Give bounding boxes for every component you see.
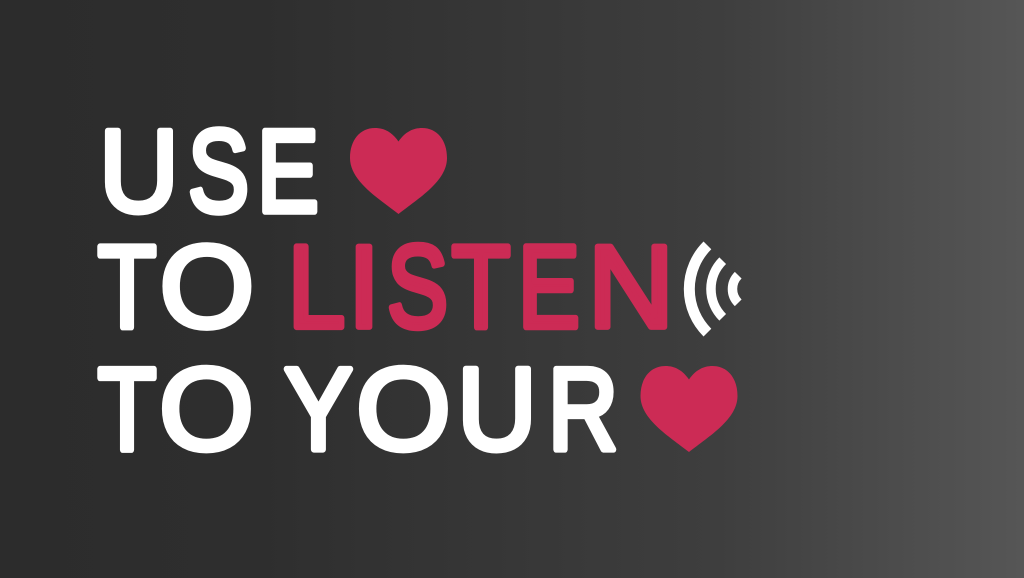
- heading line 2: LISTEN: S: [387, 222, 448, 353]
- heading line 1: USE: U: [99, 106, 179, 237]
- heading line 2: LISTEN: [288, 221, 674, 353]
- heading line 1: USE: S: [188, 106, 249, 237]
- heading line 3: TO YOUR: U: [457, 344, 537, 475]
- heading line 1: USE: E: [257, 107, 319, 237]
- heading line 3: TO YOUR: [98, 344, 618, 475]
- heading line 2: LISTEN: E: [518, 223, 580, 353]
- icon: heart 2: [640, 366, 738, 452]
- heading line 2: TO: T: [98, 221, 156, 352]
- heading line 2: LISTEN: I: [348, 221, 380, 352]
- heading line 2: LISTEN: L: [288, 222, 345, 353]
- heading line 3: TO YOUR: O: [356, 345, 451, 475]
- heading line 3: TO YOUR: Y: [284, 344, 353, 475]
- icon: sound waves: [689, 245, 738, 333]
- heading line 3: TO YOUR: R: [548, 344, 618, 475]
- heading line 1: USE: [99, 106, 319, 237]
- heading line 2: TO: O: [160, 222, 254, 353]
- heading line 2: LISTEN: N: [588, 222, 674, 353]
- icon: heart 1: [350, 128, 447, 214]
- heading line 2: TO: [98, 221, 254, 353]
- heading line 2: LISTEN: T: [452, 221, 510, 352]
- heading line 3: TO YOUR: T: [98, 344, 156, 475]
- heading line 3: TO YOUR: O: [159, 345, 254, 475]
